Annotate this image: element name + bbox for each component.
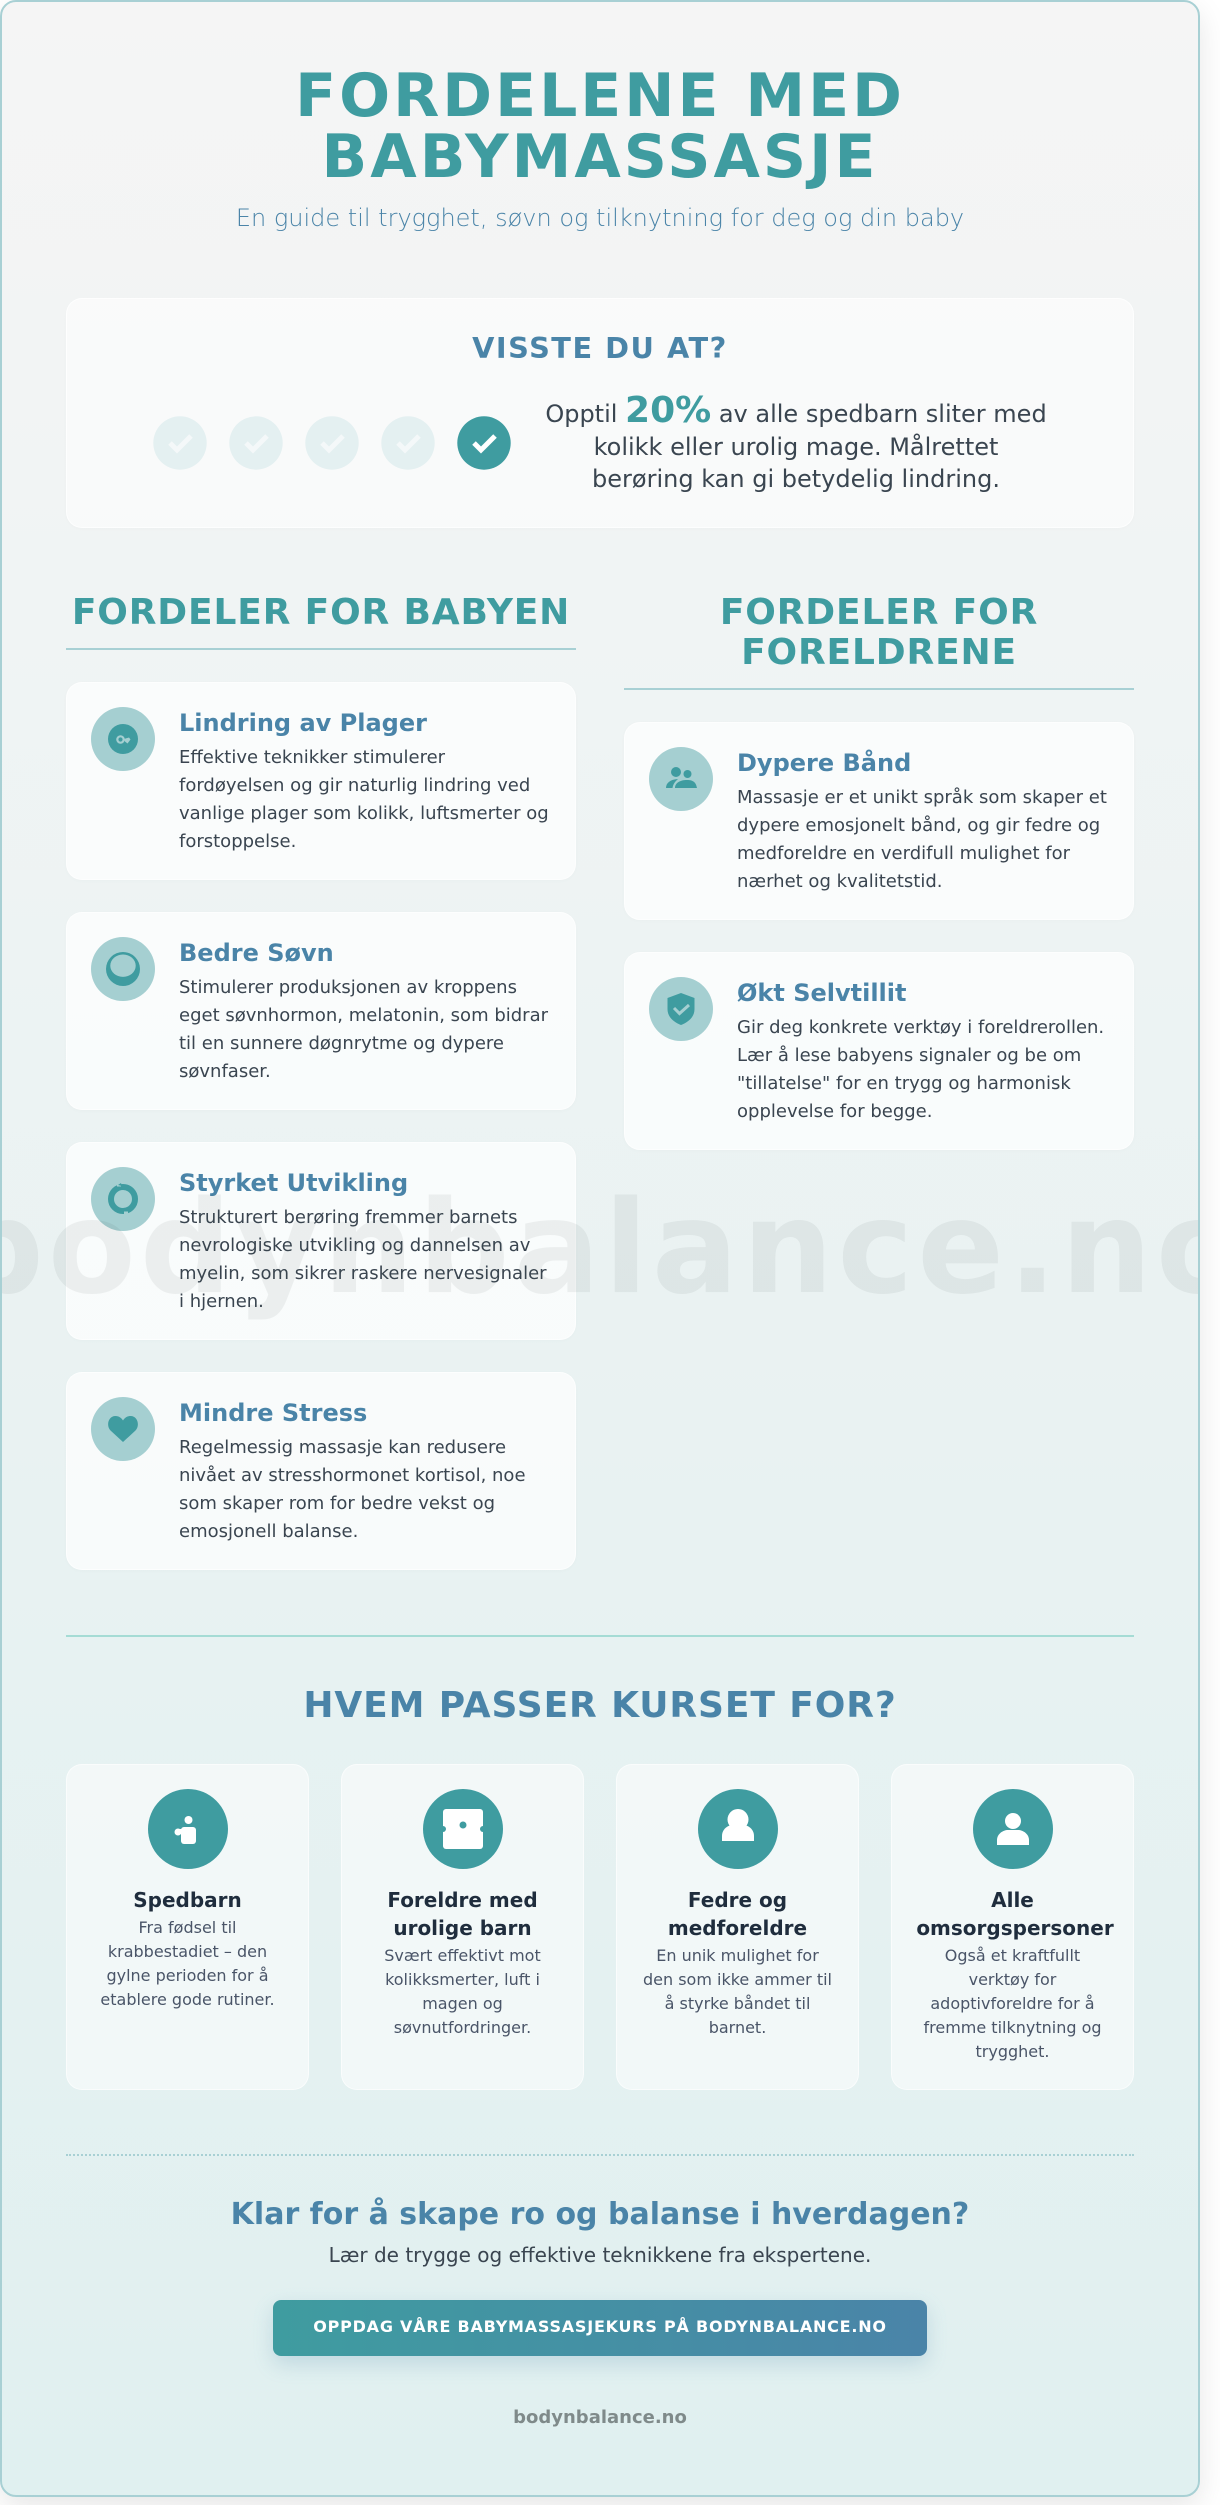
card title: Økt Selvtillit — [737, 979, 906, 1007]
card text — [384, 1888, 541, 2037]
card title: Mindre Stress — [179, 1399, 367, 1427]
card text — [737, 1017, 1104, 1122]
card text: nivået av stresshormonet kortisol, noe — [179, 1465, 526, 1486]
icon: tummy relief — [91, 707, 155, 771]
card text: medforeldre — [668, 1916, 807, 1940]
heading: parent benefits: FORELDRENE — [741, 632, 1017, 673]
card text: Foreldre med — [387, 1888, 538, 1912]
card text: Lær å lese babyens signaler og be om — [737, 1045, 1081, 1066]
subtitle: En guide til trygghet, søvn og tilknytning for deg og din baby — [236, 204, 964, 232]
card text: kolikksmerter, luft i — [385, 1970, 540, 1989]
heading: did you know: VISSTE DU AT? — [472, 331, 728, 365]
card title: Bedre Søvn — [179, 939, 334, 967]
card text: søvnfaser. — [179, 1061, 271, 1082]
title: BABYMASSASJE — [322, 122, 878, 192]
card text: som skaper rom for bedre vekst og — [179, 1493, 495, 1514]
card text: eget søvnhormon, melatonin, som bidrar — [179, 1005, 548, 1026]
card text: Fedre og — [688, 1888, 787, 1912]
card text: Stimulerer produksjonen av kroppens — [179, 977, 517, 998]
card text: å styrke båndet til — [665, 1994, 810, 2013]
card text: Gir deg konkrete verktøy i foreldrerollen. — [737, 1017, 1104, 1038]
card text: til en sunnere døgnrytme og dypere — [179, 1033, 504, 1054]
card text: Regelmessig massasje kan redusere — [179, 1437, 506, 1458]
card text: myelin, som sikrer raskere nervesignaler — [179, 1263, 547, 1284]
statistic text: kolikk eller urolig mage. Målrettet — [594, 432, 998, 460]
card text: Effektive teknikker stimulerer — [179, 747, 445, 768]
card text: dypere emosjonelt bånd, og gir fedre og — [737, 815, 1100, 836]
card text: i hjernen. — [179, 1291, 264, 1312]
title: FORDELENE MED — [295, 61, 905, 131]
card text — [179, 1207, 547, 1312]
card text: magen og — [422, 1994, 503, 2013]
statistic text — [545, 390, 1047, 493]
card text — [179, 1437, 526, 1542]
card: bond — [624, 722, 1134, 920]
card text: forstoppelse. — [179, 831, 296, 852]
title — [295, 61, 905, 192]
card text: urolige barn — [393, 1916, 532, 1940]
card text: gylne perioden for å — [106, 1966, 269, 1985]
card text — [916, 1888, 1114, 2061]
card text: opplevelse for begge. — [737, 1101, 932, 1122]
button — [273, 2300, 927, 2356]
card text — [179, 977, 548, 1082]
card title: Lindring av Plager — [179, 709, 427, 737]
footer brand: bodynbalance.no — [513, 2407, 687, 2428]
icon: sleep moon — [91, 937, 155, 1001]
card text: den som ikke ammer til — [643, 1970, 832, 1989]
icon: parent and child — [423, 1789, 503, 1869]
card text: adoptivforeldre for å — [930, 1994, 1095, 2013]
card text: emosjonell balanse. — [179, 1521, 358, 1542]
card text: Alle — [991, 1888, 1034, 1912]
card: relief — [66, 682, 576, 880]
card text: fremme tilknytning og — [923, 2018, 1102, 2037]
card text: Svært effektivt mot — [384, 1946, 541, 1965]
icon: two people — [649, 747, 713, 811]
card: confidence — [624, 952, 1134, 1150]
heading: call to action: Klar for å skape ro og balanse i hverdagen? — [231, 2197, 969, 2232]
icon: development gear — [91, 1167, 155, 1231]
card text: fordøyelsen og gir naturlig lindring ved — [179, 775, 530, 796]
icon row: one in five check marks — [153, 416, 511, 470]
card: fathers — [616, 1764, 859, 2090]
icon: heart — [91, 1397, 155, 1461]
card text: barnet. — [709, 2018, 766, 2037]
heading: parent benefits — [720, 592, 1038, 673]
card text: omsorgspersoner — [916, 1916, 1114, 1940]
card text: verktøy for — [969, 1970, 1056, 1989]
statistic text: Opptil 20% av alle spedbarn sliter med — [545, 390, 1047, 431]
card text — [179, 747, 549, 852]
card title: Styrket Utvikling — [179, 1169, 408, 1197]
card text: etablere gode rutiner. — [100, 1990, 275, 2009]
heading: parent benefits: FORDELER FOR — [720, 592, 1038, 633]
card text: "tillatelse" for en trygg og harmonisk — [737, 1073, 1071, 1094]
card text: nærhet og kvalitetstid. — [737, 871, 942, 892]
card: stress — [66, 1372, 576, 1570]
icon: person — [698, 1789, 778, 1869]
card text: nevrologiske utvikling og dannelsen av — [179, 1235, 530, 1256]
call to action text: Lær de trygge og effektive teknikkene fra ekspertene. — [329, 2243, 871, 2267]
heading: baby benefits: FORDELER FOR BABYEN — [72, 592, 570, 633]
card title: Dypere Bånd — [737, 749, 911, 777]
card: development — [66, 1142, 576, 1340]
button: OPPDAG VÅRE BABYMASSASJEKURS PÅ BODYNBALANCE.NO — [313, 2317, 887, 2336]
card text: Massasje er et unikt språk som skaper et — [737, 787, 1107, 808]
icon: caregiver — [973, 1789, 1053, 1869]
card text — [737, 787, 1107, 892]
card: all caregivers — [891, 1764, 1134, 2090]
statistic text: berøring kan gi betydelig lindring. — [592, 465, 1000, 493]
card text: trygghet. — [976, 2042, 1049, 2061]
card text: medforeldre en verdifull mulighet for — [737, 843, 1070, 864]
card text: søvnutfordringer. — [394, 2018, 531, 2037]
card text: Også et kraftfullt — [945, 1946, 1080, 1965]
card: sleep — [66, 912, 576, 1110]
card: parents with restless babies — [341, 1764, 584, 2090]
card: infants — [66, 1764, 309, 2090]
card text — [100, 1888, 275, 2009]
icon: shield check — [649, 977, 713, 1041]
icon: infant — [148, 1789, 228, 1869]
card text — [643, 1888, 832, 2037]
card text: Strukturert berøring fremmer barnets — [179, 1207, 517, 1228]
card text: Spedbarn — [133, 1888, 242, 1912]
card text: krabbestadiet – den — [108, 1942, 267, 1961]
card text: vanlige plager som kolikk, luftsmerter og — [179, 803, 549, 824]
card text: En unik mulighet for — [656, 1946, 819, 1965]
panel: did you know — [66, 298, 1134, 528]
card text: Fra fødsel til — [139, 1918, 236, 1937]
heading: who is it for: HVEM PASSER KURSET FOR? — [303, 1685, 897, 1726]
